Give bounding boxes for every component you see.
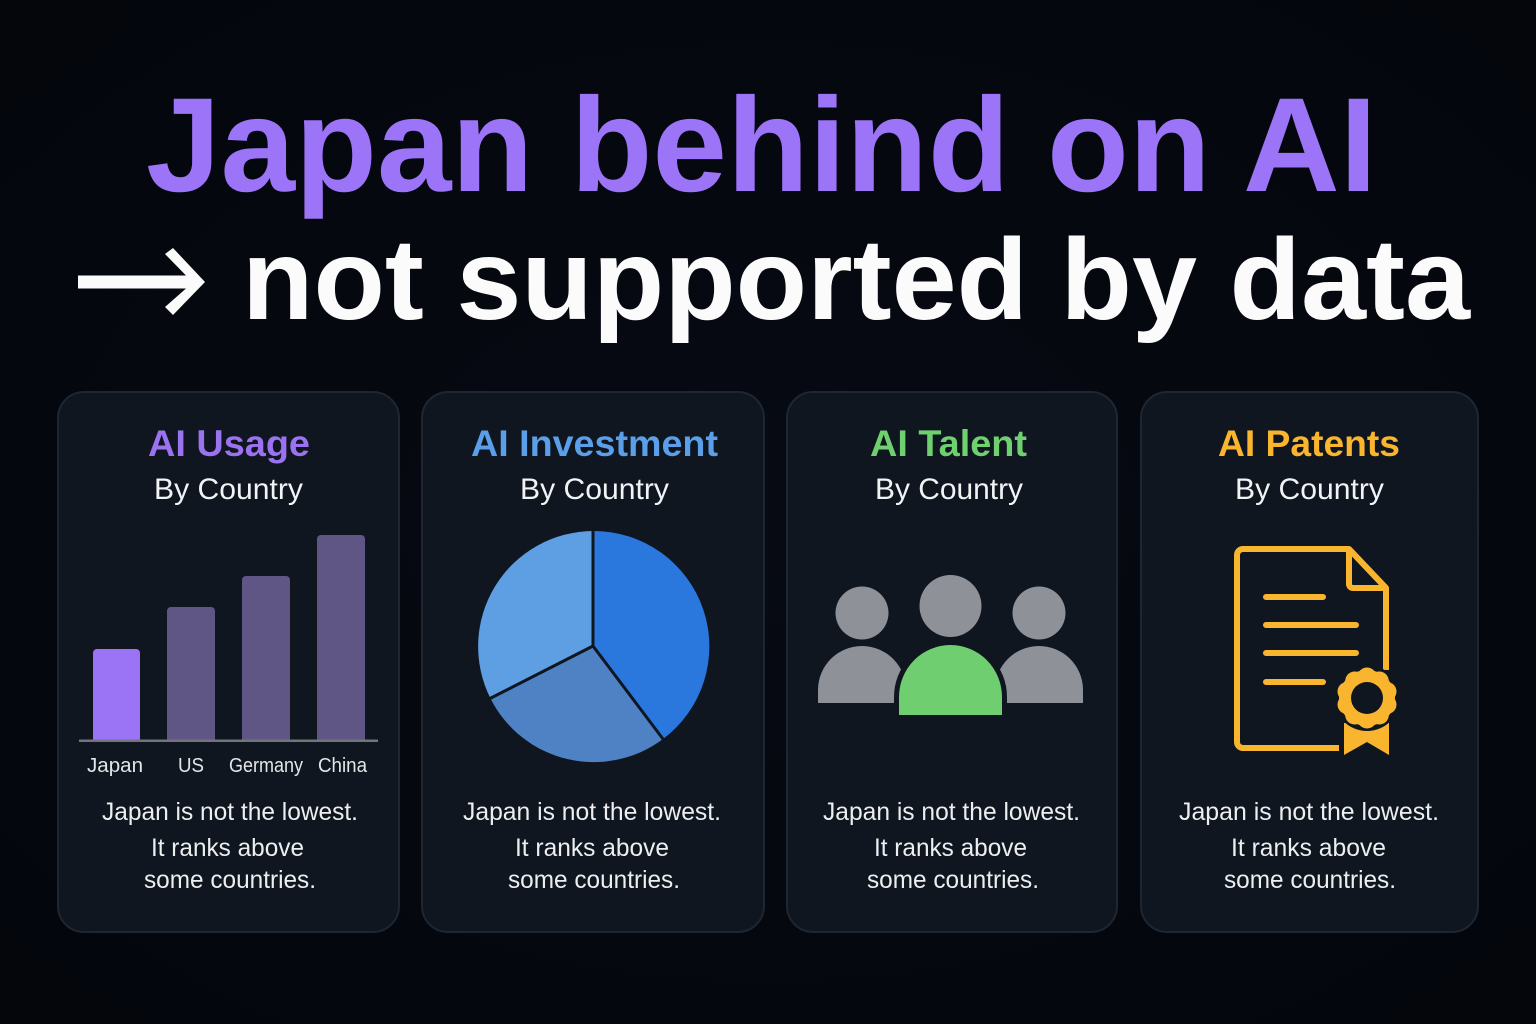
body text: some countries. xyxy=(867,866,1039,894)
slice: dark blue xyxy=(594,531,709,739)
body text: some countries. xyxy=(1224,866,1396,894)
body text xyxy=(1179,798,1439,894)
body text: Japan is not the lowest. xyxy=(1179,798,1439,826)
seal xyxy=(1334,665,1400,731)
icon: title arrow xyxy=(78,248,205,315)
label: Japan: Japan xyxy=(87,755,143,777)
subheading: By Country xyxy=(875,473,1023,506)
subheading: By Country xyxy=(154,473,303,506)
body text: It ranks above xyxy=(515,834,669,862)
heading: AI Patents: AI Patents xyxy=(1218,423,1400,464)
label: China: China xyxy=(318,755,368,777)
body text: some countries. xyxy=(144,866,316,894)
body text: Japan is not the lowest. xyxy=(102,798,358,826)
person: left xyxy=(818,586,906,703)
ribbon xyxy=(1344,723,1389,755)
bar: China xyxy=(317,535,365,740)
body text: Japan is not the lowest. xyxy=(463,798,721,826)
person: center highlighted xyxy=(899,575,1002,715)
label: US: US xyxy=(178,755,204,777)
document outline xyxy=(1237,549,1386,748)
panel: AI Usage xyxy=(58,392,399,932)
label: Germany: Germany xyxy=(229,755,303,777)
body text: It ranks above xyxy=(1231,834,1386,862)
title line 1: Japan behind on AI xyxy=(146,71,1377,220)
heading: AI Usage: AI Usage xyxy=(148,423,310,464)
bar: Japan xyxy=(93,649,140,740)
bar: US xyxy=(167,607,215,740)
heading: AI Talent: AI Talent xyxy=(870,423,1027,464)
body text: It ranks above xyxy=(151,834,304,862)
title line 2: not supported by data xyxy=(242,216,1471,344)
panel: AI Investment xyxy=(422,392,764,932)
body text xyxy=(463,798,721,894)
body text xyxy=(823,798,1080,894)
pie chart xyxy=(478,527,709,762)
document lines xyxy=(1266,597,1356,682)
heading: AI Investment: AI Investment xyxy=(471,423,718,464)
person: right xyxy=(995,586,1083,703)
subheading: By Country xyxy=(1235,473,1384,506)
subheading: By Country xyxy=(520,473,669,506)
icon: patent document xyxy=(1237,549,1400,755)
body text: some countries. xyxy=(508,866,680,894)
bar: Germany xyxy=(242,576,290,740)
panel: AI Talent xyxy=(787,392,1117,932)
body text xyxy=(102,798,358,894)
slice: light blue xyxy=(478,531,594,698)
panel: AI Patents xyxy=(1141,392,1478,932)
body text: Japan is not the lowest. xyxy=(823,798,1080,826)
body text: It ranks above xyxy=(874,834,1027,862)
icon: people group xyxy=(818,575,1083,715)
slice: mid blue xyxy=(490,646,663,762)
bar chart xyxy=(79,535,378,777)
title xyxy=(78,71,1471,344)
